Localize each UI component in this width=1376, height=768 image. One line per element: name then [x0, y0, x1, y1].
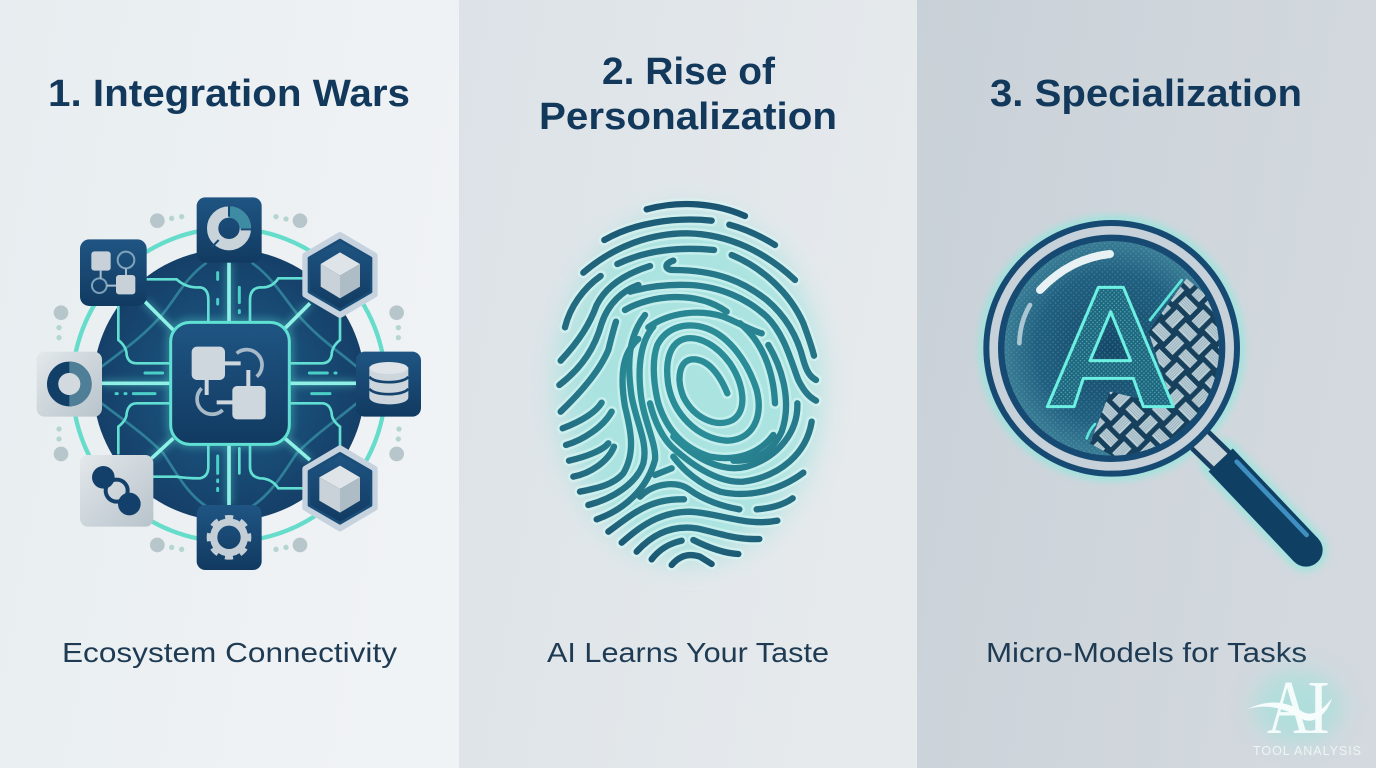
- tile: donut left: [37, 352, 102, 417]
- tile: chart top: [197, 197, 262, 263]
- caption: micro-models for tasks: Micro-Models for Tasks: [986, 637, 1307, 668]
- tile: gear bottom: [197, 505, 262, 570]
- logo: ai tool analysis: A: [1267, 666, 1311, 750]
- lens frame: [983, 220, 1240, 477]
- icon: hub network: [37, 197, 421, 570]
- tile: database right: [356, 352, 421, 417]
- logo: ai tool analysis: TOOL ANALYSIS: [1253, 744, 1361, 758]
- tile: linked circles bottom left: [80, 455, 153, 527]
- panel: specialization: [917, 0, 1376, 768]
- tile: workflow top left: [80, 239, 147, 306]
- logo: ai tool analysis: I: [1307, 666, 1330, 750]
- panel background: [459, 0, 917, 768]
- heading: rise of personalization: Personalization: [539, 96, 837, 138]
- caption: ecosystem connectivity: Ecosystem Connectivity: [62, 637, 397, 668]
- tile: cube hexagon top right: [306, 235, 374, 315]
- panel background: [917, 0, 1376, 768]
- icon: magnifying glass: [979, 216, 1323, 567]
- lens highlights: [1019, 254, 1182, 438]
- lens: [1004, 241, 1223, 458]
- dim circuit traces: [102, 263, 357, 507]
- main spokes: [102, 263, 357, 505]
- panel: rise of personalization: [459, 0, 917, 768]
- icon: fingerprint: [558, 204, 818, 565]
- heading: rise of personalization: [539, 51, 837, 138]
- glow: [979, 216, 1306, 550]
- letter A glow: [1047, 287, 1173, 407]
- heading: integration wars: 1. Integration Wars: [48, 73, 410, 115]
- hub workflow icon: [192, 347, 266, 419]
- ferrule: [1200, 440, 1224, 463]
- connection ring: [72, 228, 386, 542]
- woven fabric: [1090, 278, 1223, 458]
- fingerprint highlights: [559, 204, 816, 565]
- heading: specialization: 3. Specialization: [990, 73, 1302, 115]
- decorative dots: [54, 213, 404, 552]
- central hub tile: [171, 322, 289, 444]
- panel: integration wars: [0, 0, 459, 768]
- dark hub disc: [93, 249, 365, 521]
- fingerprint ridges: [559, 204, 816, 565]
- tile: cube hexagon bottom right: [306, 449, 374, 528]
- logo: ai tool analysis: [1248, 666, 1361, 758]
- bright circuit traces: [118, 278, 340, 488]
- handle: [1221, 460, 1323, 567]
- caption: ai learns your taste: AI Learns Your Taste: [547, 637, 829, 668]
- glow traces: [102, 263, 357, 505]
- heading: rise of personalization: 2. Rise of: [602, 51, 775, 93]
- short data dashes: [116, 273, 336, 491]
- letter A: [1047, 287, 1173, 407]
- panel background: [0, 0, 459, 768]
- fingerprint glow: [558, 213, 818, 560]
